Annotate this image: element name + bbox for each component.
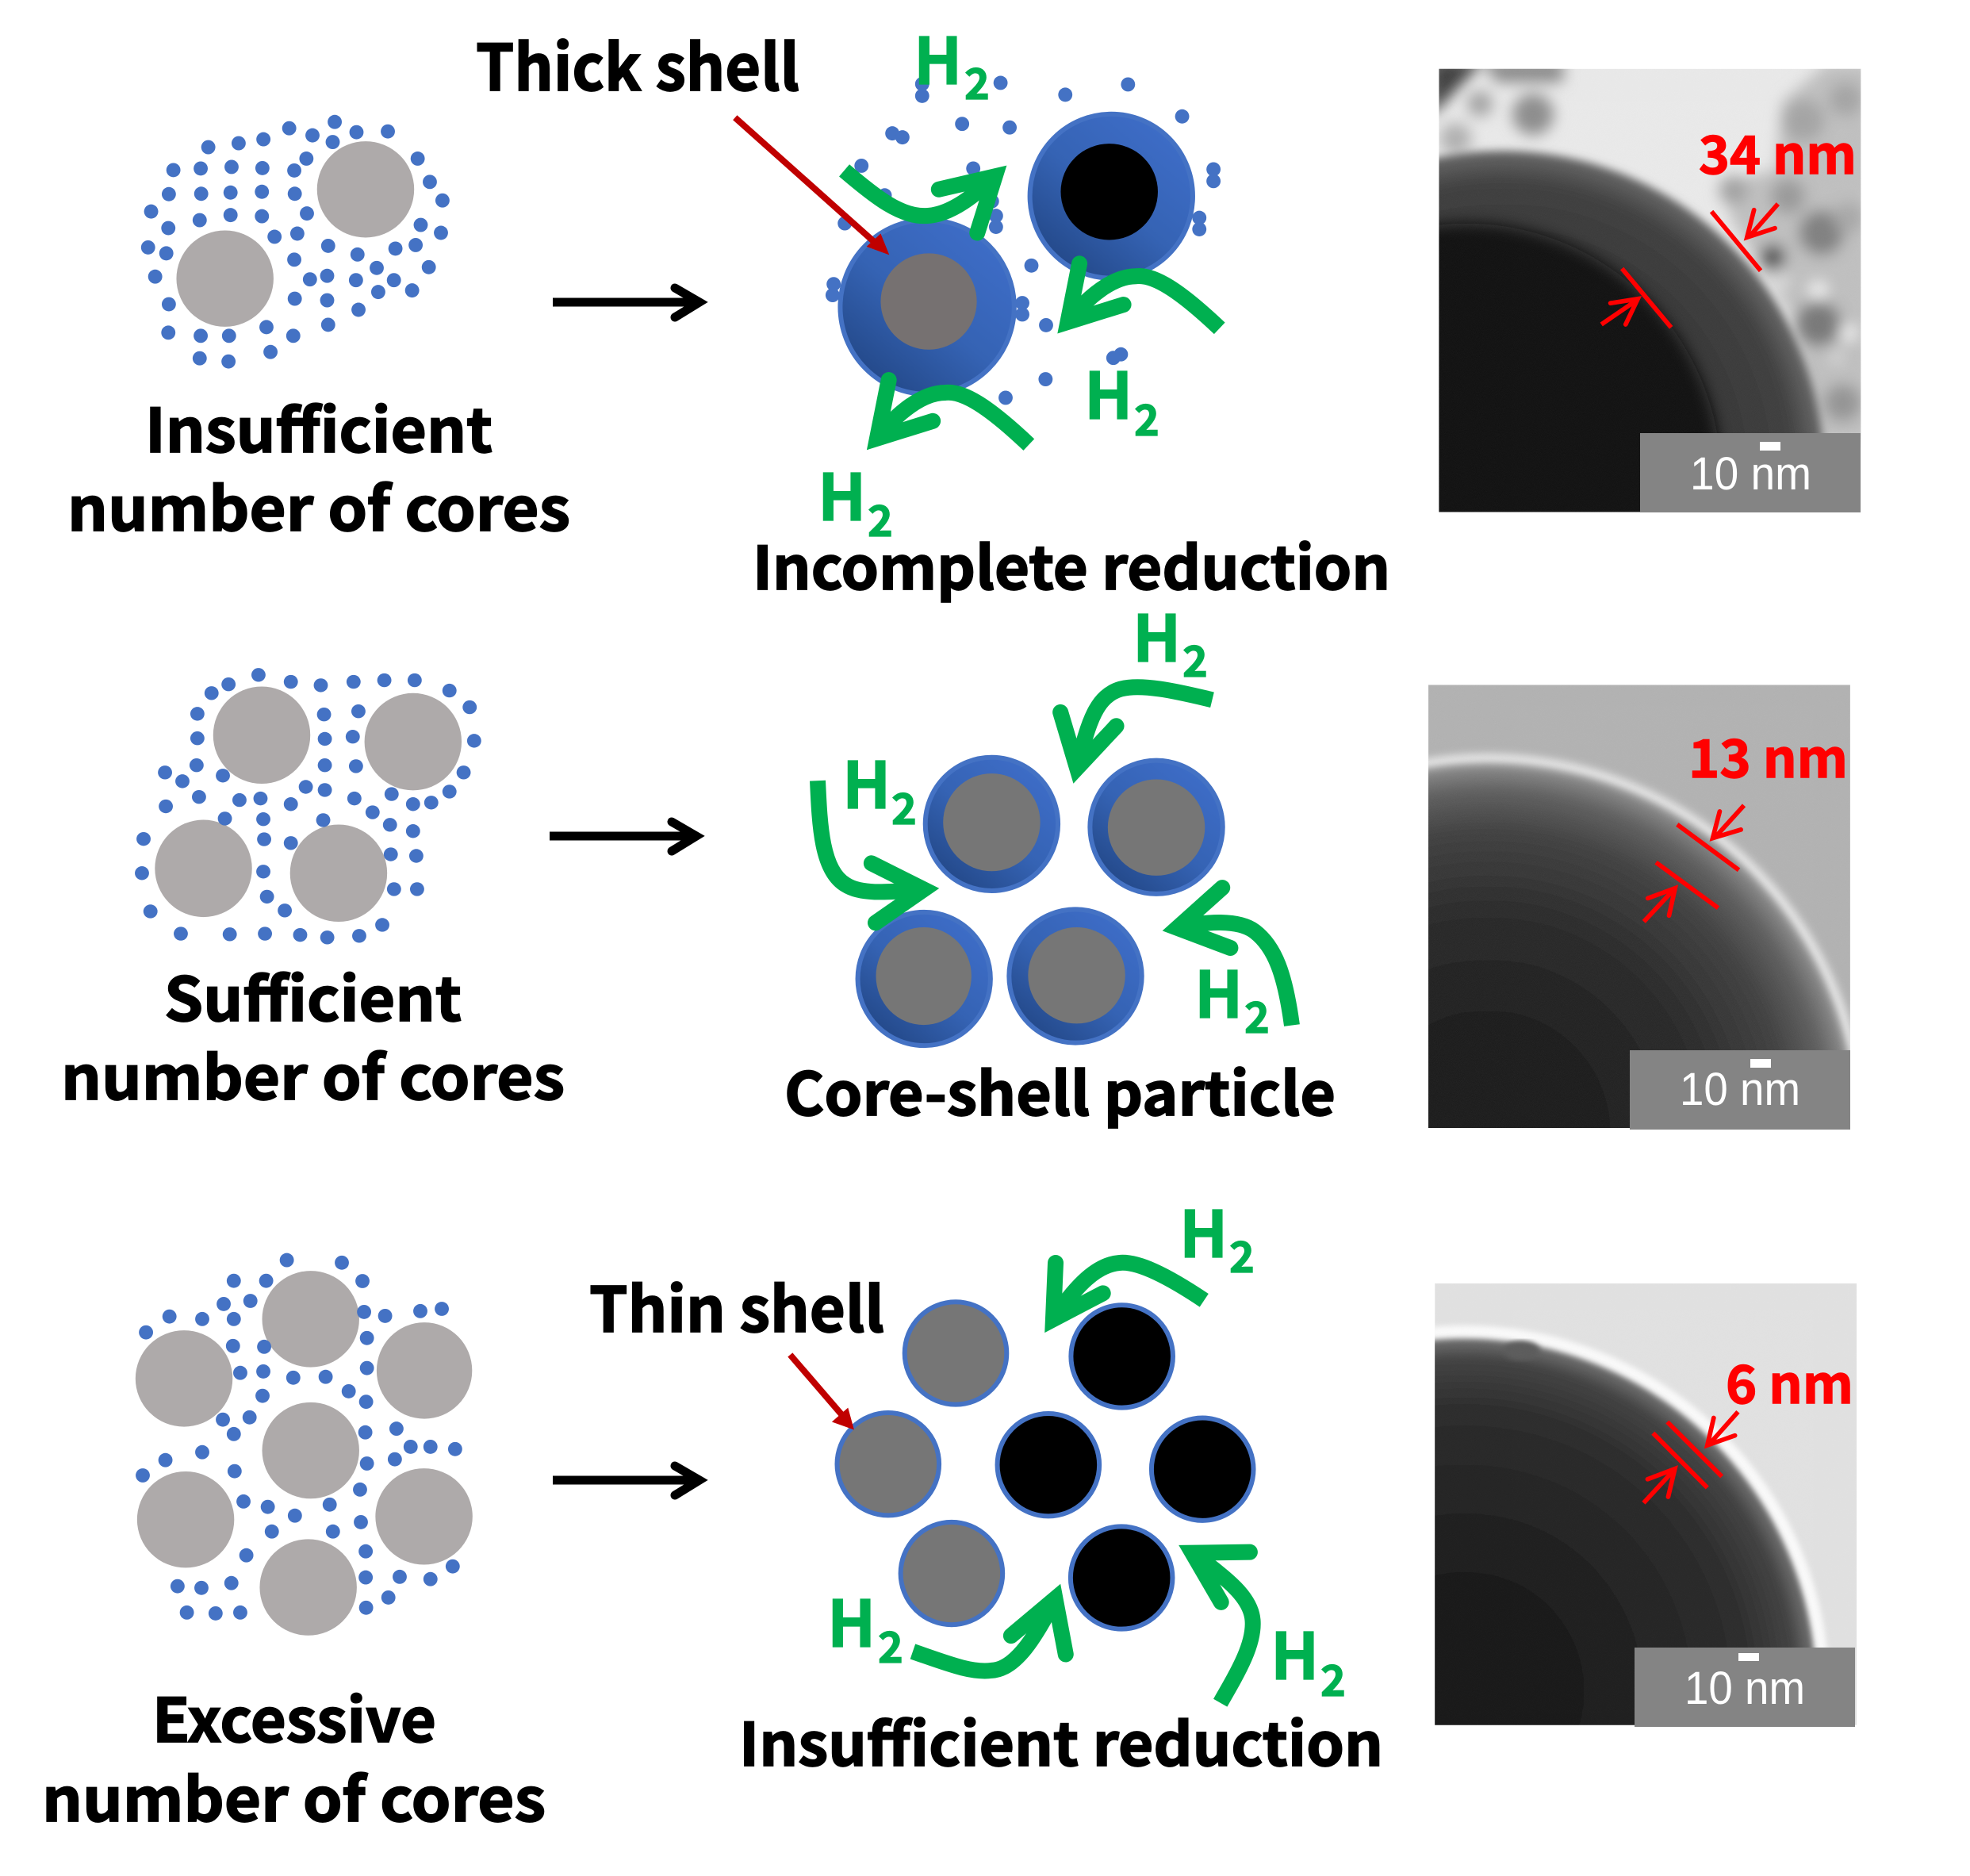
heading: Sufficient number of cores [61,951,565,1117]
TEM image: 34 nm shell [1439,68,1861,512]
heading: Sufficient number of cores: number of cores [61,1030,565,1117]
heading: Insufficient number of cores: number of cores [67,461,570,548]
particle: grey [901,1522,1002,1625]
H2 label: 2 [1320,1646,1346,1709]
particle [858,912,991,1045]
label: Core-shell particle: Core-shell particle [784,1046,1336,1133]
green arrow: H2 left [818,781,924,923]
H2 label: 2 [1182,627,1208,689]
measurement ticks and arrows [1601,204,1778,328]
scale bar: row 3: 10 nm [1684,1663,1805,1714]
H2 label: H [914,10,962,103]
measurement ticks and arrows [1643,1412,1738,1503]
dots [826,76,1221,405]
particle: black [1071,1526,1172,1629]
particle: grey [905,1302,1006,1405]
dots [141,115,450,369]
TEM image: 6 nm shell [1435,1283,1857,1725]
H2 label: H [1133,588,1181,681]
H2 label: H [827,1573,876,1666]
particle: black [1152,1418,1254,1521]
measurement ticks and arrows [1644,805,1744,922]
particle: black [998,1414,1099,1516]
heading: Sufficient number of cores: Sufficient [164,951,462,1038]
scale bar: row 1: 10 nm [1690,448,1811,500]
arrow: row 3 process [553,1466,699,1495]
row 1: precursor cluster with two cores and blue dots [141,115,450,369]
particle: thick shell black core [1030,114,1193,278]
green arrow: H2 right [1178,888,1292,1026]
H2 label: H [1084,345,1133,438]
label: Incomplete reduction: Incomplete reduction [753,520,1390,607]
green arrow: H2 top [845,171,995,232]
scale bar: row 2 [1630,1050,1850,1130]
scale bar: row 2: 10 nm [1680,1064,1800,1115]
particle: black [1071,1305,1173,1408]
H2 label: H [1271,1606,1319,1698]
scale bar: row 1 [1640,433,1861,512]
particle [926,758,1058,891]
label: Insufficient reduction: Insufficient reduction [739,1697,1383,1783]
H2 label: 2 [891,774,917,837]
heading: Excessive number of cores: Excessive [152,1672,436,1759]
cores [136,1271,473,1636]
scale bar: row 3 [1635,1648,1855,1727]
row 2: core-shell particles with hydrogen [818,687,1292,1045]
H2 label: 2 [1244,983,1270,1045]
green arrow: H2 bottom [913,1598,1066,1671]
H2 label: H [818,447,866,539]
row 1: thick-shell particles with hydrogen [735,76,1221,445]
green arrow: H2 right [1067,263,1220,328]
particle [1090,761,1223,894]
label: Thick shell: Thick shell [476,17,799,109]
arrow: row 2 process [550,822,696,851]
thickness label: 6 nm: 6 nm [1726,1343,1853,1419]
H2 label: 2 [964,49,990,112]
arrow: row 1 process [553,288,699,317]
green arrow: H2 bottom [877,380,1029,445]
red arrow: thin shell pointer [790,1355,854,1429]
green arrow: H2 top [1060,687,1212,768]
row 3: precursor cluster with seven cores and blue dots [136,1253,473,1636]
H2 label: H [1194,944,1243,1037]
H2 label: 2 [1229,1222,1255,1285]
heading: Excessive number of cores [42,1672,546,1839]
dots [136,1253,462,1621]
H2 label: 2 [1134,386,1159,448]
thickness label: 13 nm: 13 nm [1688,717,1848,793]
thickness label: 34 nm: 34 nm [1699,113,1857,190]
green arrow: H2 right [1192,1552,1253,1703]
cores [176,141,414,327]
heading: Excessive number of cores: number of cores [42,1751,546,1839]
particle [1009,909,1142,1043]
TEM image: 13 nm shell [1428,685,1850,1128]
heading: Insufficient number of cores [67,382,570,548]
red arrow: thick shell pointer [735,117,889,255]
row 2: precursor cluster with four cores and blue dots [135,668,481,944]
row 3: thin-shell particles with hydrogen [790,1263,1254,1703]
H2 label: H [1179,1184,1228,1276]
H2 label: 2 [868,486,893,549]
dots [135,668,481,944]
heading: Insufficient number of cores: Insufficient [145,382,492,470]
green arrow: H2 top [1053,1263,1204,1319]
particle: thick shell grey core [840,220,1014,394]
H2 label: 2 [878,1613,903,1675]
label: Thin shell: Thin shell [589,1261,884,1350]
particle: grey [837,1413,939,1515]
cores [155,686,462,922]
H2 label: H [842,735,891,827]
